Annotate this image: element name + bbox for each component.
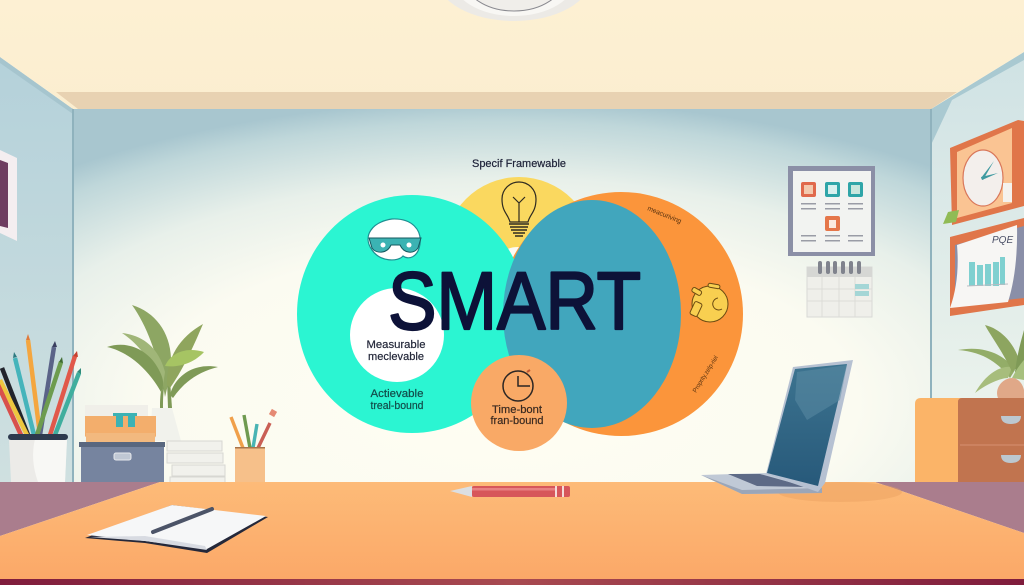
icon: stopwatch [689, 283, 728, 322]
yellow circle: specific [444, 177, 594, 327]
framed chart on wall [950, 218, 1024, 316]
leaf [943, 210, 959, 224]
icon: head with glasses [368, 219, 421, 260]
table top [0, 482, 1024, 580]
table front edge [0, 579, 1024, 585]
poster with icons [788, 166, 875, 256]
open notebook with pen [85, 505, 268, 553]
white inner circle [350, 288, 444, 382]
right side wall [931, 52, 1024, 482]
ceiling clock [437, 0, 591, 21]
plant leaves [107, 305, 218, 398]
ceiling beam [56, 92, 957, 109]
chart bars [969, 257, 1005, 286]
top label: Specif Framewable [472, 158, 566, 170]
right cabinet [915, 398, 1024, 482]
teal circle: measurable [297, 195, 527, 433]
laptop [701, 360, 902, 502]
left wall picture frame [0, 150, 17, 241]
floor left [0, 482, 160, 536]
stacked books and box [85, 405, 156, 442]
SMART Venn diagram: treal-bound [370, 400, 424, 412]
potted plant [107, 305, 218, 441]
SMART Venn diagram [297, 158, 743, 451]
SMART Venn diagram: fran-bound [490, 415, 544, 427]
wall calendar [807, 261, 872, 317]
SMART title: SMART [388, 256, 641, 347]
stacked papers [167, 441, 225, 483]
measurable label: meclevable [368, 351, 424, 363]
red pen on table [450, 486, 570, 497]
achievable label: Actievable [370, 388, 424, 400]
SMART Venn diagram: Measurable [366, 339, 426, 351]
back wall [73, 108, 931, 484]
orange circle: relevant [499, 192, 743, 436]
pencil holder left [0, 334, 81, 482]
floor right [875, 482, 1024, 533]
poster icon row [801, 182, 863, 231]
icon: light bulb [502, 182, 536, 236]
ceiling [0, 0, 1024, 109]
blue overlap ellipse [503, 200, 681, 428]
grey drawer unit [79, 442, 165, 482]
left side wall [0, 57, 73, 482]
plant on cabinet [958, 325, 1024, 398]
framed wall clock [943, 120, 1024, 225]
time-bound label: Time-bont [492, 404, 542, 416]
small orange circle: time-bound [471, 355, 567, 451]
arc label upper: meacuriving [646, 205, 682, 225]
chart label: PQE [992, 235, 1013, 246]
icon: clock [503, 370, 533, 401]
small pencil cup [231, 409, 277, 482]
arc label lower: Proprity.zelp-riel [692, 354, 720, 394]
